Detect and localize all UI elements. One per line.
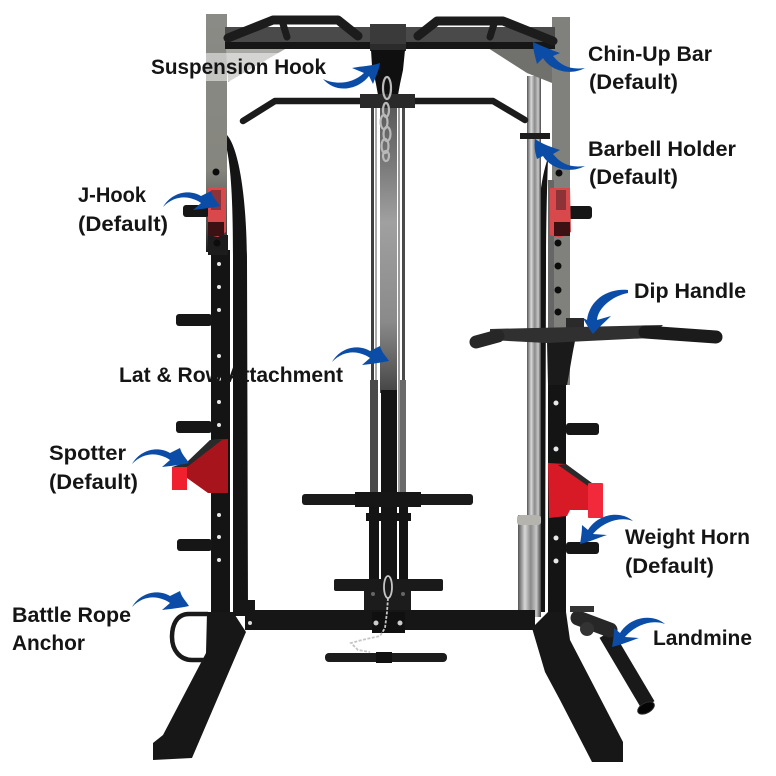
spotter left — [172, 439, 228, 493]
arrow: weight horn — [580, 515, 633, 544]
label: weight horn: Weight Horn — [625, 526, 750, 549]
weight bars on center — [302, 492, 473, 612]
label: chin-up bar: (Default) — [589, 71, 678, 94]
label: battle rope anchor — [12, 604, 131, 655]
spotter right — [548, 463, 603, 518]
back columns and J curves — [227, 135, 548, 612]
label: chin-up bar: Chin-Up Bar — [588, 43, 712, 66]
label: suspension hook: Suspension Hook — [151, 56, 326, 79]
braces — [226, 48, 552, 83]
right upright — [548, 17, 570, 640]
label: chin-up bar — [588, 43, 712, 94]
label: spotter — [49, 442, 138, 494]
left upright — [206, 14, 230, 612]
label: dip handle: Dip Handle — [634, 280, 746, 303]
arrow: landmine — [612, 618, 665, 647]
right weight horns — [566, 206, 599, 554]
label: lat and row attachment: Lat & Row Attachment — [119, 364, 343, 387]
rack frame — [153, 14, 716, 762]
lower chain — [351, 576, 392, 652]
label: barbell holder: (Default) — [589, 166, 678, 189]
arrow: dip handle — [583, 290, 628, 334]
chin-up bar — [228, 20, 553, 41]
J-hook left — [208, 187, 226, 237]
arrow: suspension hook — [323, 63, 380, 89]
label: j-hook — [78, 184, 168, 236]
center top bracket — [371, 50, 405, 95]
label: spotter: Spotter — [49, 442, 126, 465]
label: j-hook: J-Hook — [78, 184, 146, 207]
landmine — [570, 606, 656, 717]
arrow: chin-up bar — [533, 42, 585, 72]
arrow: spotter — [132, 448, 189, 467]
arrow: barbell holder — [535, 139, 585, 170]
arrow: battle rope anchor — [132, 591, 189, 610]
base crossbar — [233, 600, 535, 633]
lower handle — [325, 652, 447, 663]
label: weight horn — [625, 526, 750, 578]
label: j-hook: (Default) — [78, 213, 168, 236]
lat bar — [243, 94, 525, 121]
dip handle — [476, 318, 716, 385]
right foot — [532, 612, 623, 762]
arrow: lat and row — [332, 346, 389, 365]
arrow: j-hook — [163, 191, 220, 210]
upper chain — [380, 77, 391, 161]
label: barbell holder: Barbell Holder — [588, 138, 736, 161]
battle rope anchor — [172, 614, 208, 660]
label: barbell holder — [588, 138, 736, 189]
left weight horns — [176, 205, 212, 551]
left foot — [153, 612, 246, 760]
lat column — [370, 108, 406, 610]
lower pulley housing — [366, 504, 411, 582]
label background: suspension hook — [206, 53, 290, 81]
label: weight horn: (Default) — [625, 555, 714, 578]
barbell bar — [517, 76, 541, 617]
label: battle rope anchor: Anchor — [12, 632, 85, 655]
label: spotter: (Default) — [49, 471, 138, 494]
J-hook right — [550, 188, 571, 238]
barbell holder — [520, 133, 550, 139]
top crossbar — [225, 24, 555, 51]
label: landmine: Landmine — [653, 627, 752, 650]
upright holes — [212, 168, 562, 564]
label: battle rope anchor: Battle Rope — [12, 604, 131, 627]
